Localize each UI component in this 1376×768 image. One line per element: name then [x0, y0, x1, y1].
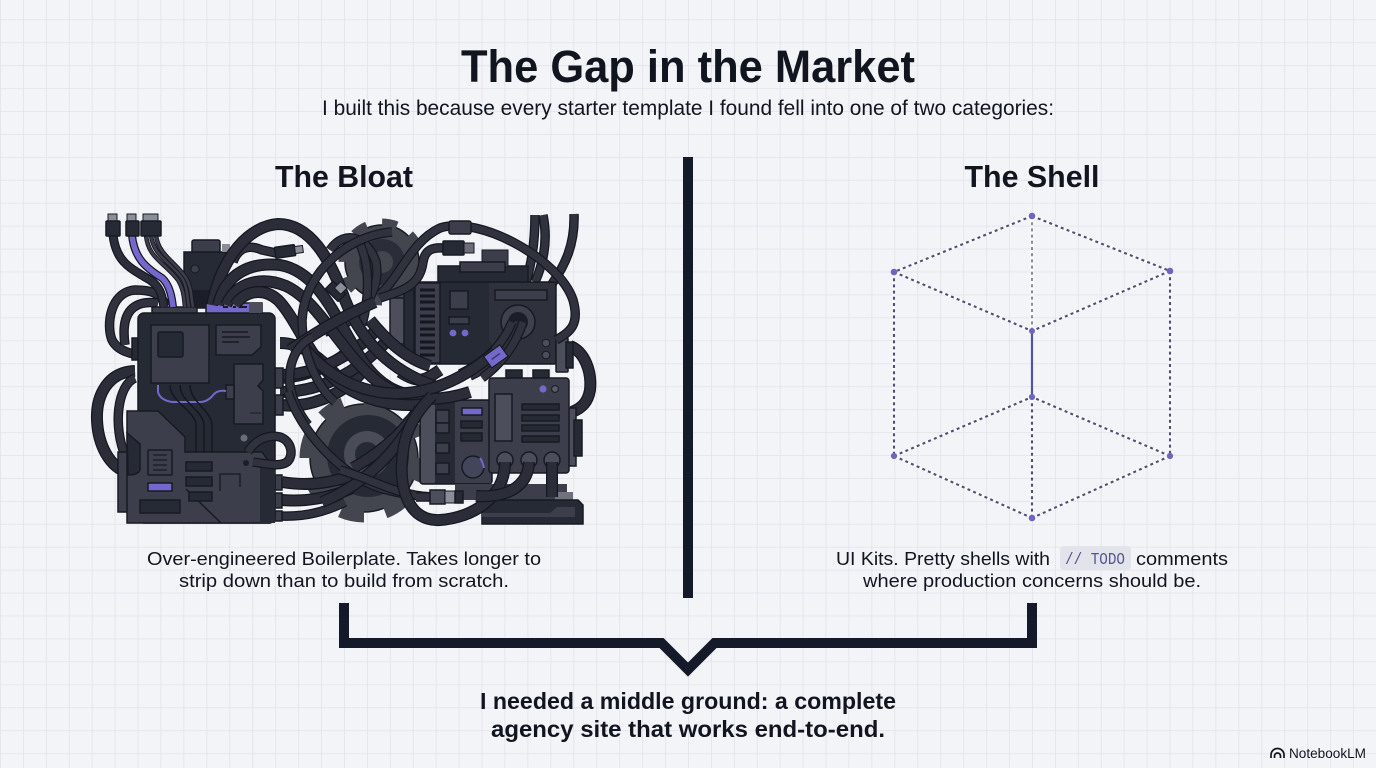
logo: NotebookLM: NotebookLM — [1289, 746, 1366, 761]
plugs: top-left connectors — [106, 214, 161, 236]
plug: USB left — [274, 245, 303, 258]
gear: top — [343, 223, 421, 301]
component: rear box — [184, 240, 230, 308]
text: Shell description — [836, 546, 1228, 591]
vertical divider — [683, 157, 693, 598]
illustration: tangled machine — [97, 214, 590, 524]
plugs: tangle connectors — [325, 221, 508, 504]
text: Shell description: where production concerns should be. — [862, 570, 1201, 591]
bracket connector — [344, 603, 1032, 670]
illustration: wireframe cube — [891, 213, 1173, 521]
conclusion text — [480, 688, 896, 742]
component: main board — [138, 313, 275, 523]
heading: The Shell: The Shell — [964, 159, 1100, 194]
machine: bottom right side panel — [420, 400, 492, 484]
text: Bloat description: Over-engineered Boilerplate. Takes longer to — [147, 548, 541, 569]
code chip: TODO: // TODO — [1065, 551, 1125, 570]
text: Shell description: UI Kits. Pretty shells with — [836, 548, 1050, 569]
component: lower-left block — [127, 411, 275, 523]
conclusion text: agency site that works end-to-end. — [491, 716, 885, 742]
cables: back layer — [97, 214, 590, 516]
icon: NotebookLM arcs — [1271, 748, 1284, 758]
text: Bloat description — [147, 548, 541, 591]
subtitle: I built this because every starter template I found fell into one of two categories: — [322, 97, 1054, 120]
machine: bottom right main — [489, 370, 582, 473]
top tabs on board — [152, 303, 262, 313]
gear: bottom — [306, 400, 422, 516]
text: Bloat description: strip down than to build from scratch. — [179, 570, 509, 591]
conclusion text: I needed a middle ground: a complete — [480, 688, 896, 714]
cables: front tangle — [212, 224, 575, 520]
machine: top right — [390, 250, 573, 372]
component: side connectors — [118, 338, 283, 521]
machine: bottom base — [455, 484, 583, 524]
plug cables with purple strand — [113, 235, 193, 307]
text: Shell description: comments — [1136, 548, 1228, 569]
cable loop: small — [248, 436, 291, 465]
code chip: TODO — [1060, 546, 1131, 570]
heading: The Bloat: The Bloat — [275, 159, 413, 194]
title: The Gap in the Market — [461, 41, 915, 92]
